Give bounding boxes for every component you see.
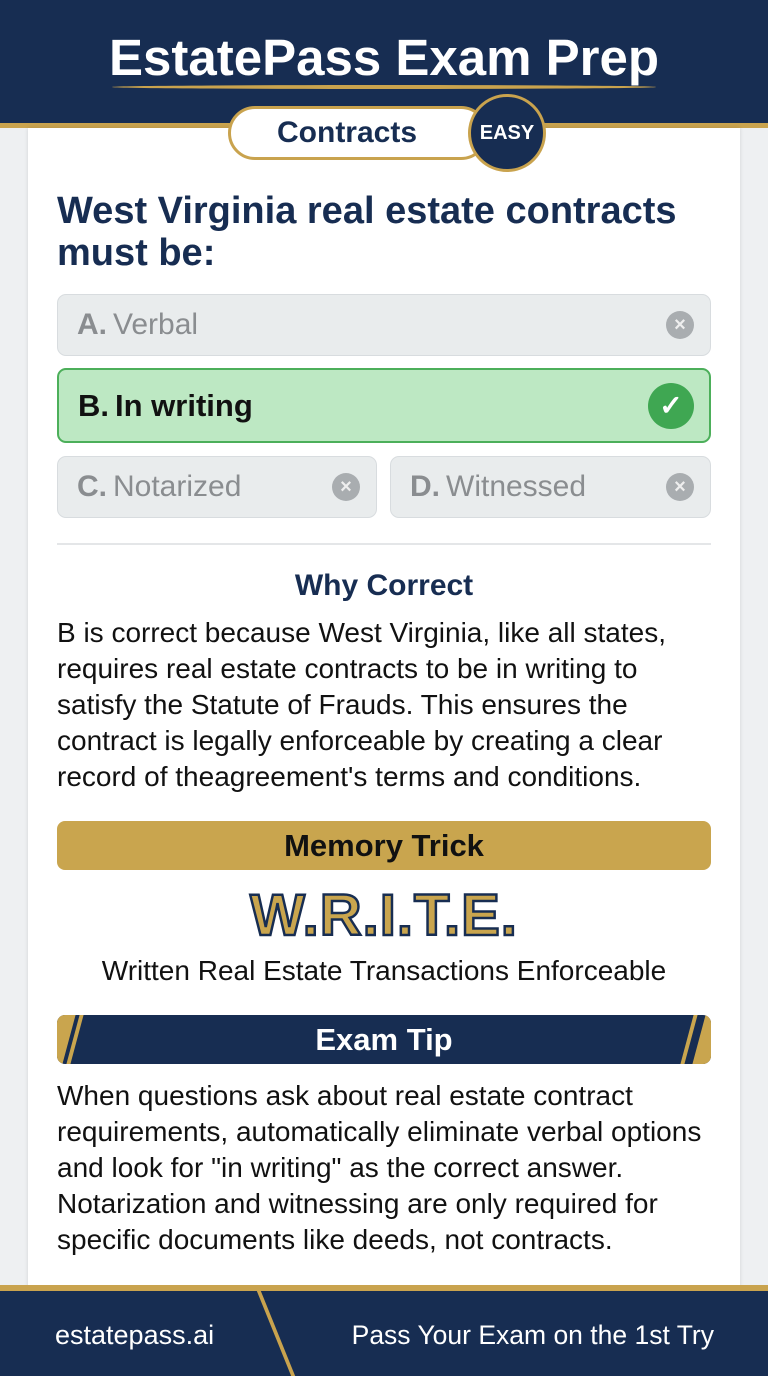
option B correct: [57, 368, 711, 443]
option D: [390, 456, 711, 518]
badge: EASY: EASY: [480, 122, 534, 144]
explanation text: B is correct because West Virginia, like all states,: [57, 617, 666, 648]
footer site: estatepass.ai: [55, 1320, 214, 1350]
explanation text: contract is legally enforceable by creating a clear: [57, 725, 662, 756]
title: EstatePass Exam Prep: [109, 29, 659, 86]
mnemonic W.R.I.T.E.: W.R.I.T.E.: [250, 883, 518, 948]
footer: [0, 1285, 768, 1376]
option A: A.: [77, 308, 107, 341]
option C: [57, 456, 377, 518]
mnemonic meaning: Written Real Estate Transactions Enforceable: [102, 955, 666, 986]
option D: ×: [674, 476, 686, 498]
option B correct: B.: [78, 388, 109, 422]
exam tip text: and look for "in writing" as the correct answer.: [57, 1152, 623, 1183]
footer slogan: Pass Your Exam on the 1st Try: [352, 1320, 714, 1350]
exam tip banner: Exam Tip: [315, 1022, 453, 1057]
option A: Verbal: [113, 308, 198, 341]
topic pill: [228, 106, 488, 160]
option C: C.: [77, 470, 107, 503]
option D: Witnessed: [446, 470, 586, 503]
topic pill: Contracts: [277, 116, 417, 149]
explanation text: satisfy the Statute of Frauds. This ensures the: [57, 689, 628, 720]
card: [28, 128, 740, 1288]
exam tip text: specific documents like deeds, not contracts.: [57, 1224, 613, 1255]
option A: [57, 294, 711, 356]
memory trick banner: [57, 821, 711, 870]
question: must be:: [57, 232, 215, 274]
exam tip text: [57, 1080, 701, 1255]
option C: Notarized: [113, 470, 241, 503]
heading: why correct: Why Correct: [295, 569, 473, 602]
explanation text: record of theagreement's terms and conditions.: [57, 761, 641, 792]
question: West Virginia real estate contracts: [57, 190, 677, 232]
exam tip banner: [57, 1015, 711, 1064]
badge: EASY: [468, 94, 546, 172]
exam tip text: requirements, automatically eliminate verbal options: [57, 1116, 701, 1147]
option B correct: ✓: [659, 390, 683, 420]
option A: ×: [674, 314, 686, 336]
question: [57, 190, 677, 274]
exam tip text: Notarization and witnessing are only required for: [57, 1188, 658, 1219]
option C: ×: [340, 476, 352, 498]
memory trick banner: Memory Trick: [284, 828, 484, 863]
gold underline: [112, 85, 656, 89]
explanation text: requires real estate contracts to be in writing to: [57, 653, 638, 684]
option B correct: In writing: [115, 388, 253, 422]
exam tip text: When questions ask about real estate contract: [57, 1080, 633, 1111]
explanation text: [57, 617, 666, 792]
header: [0, 0, 768, 128]
option D: D.: [410, 470, 440, 503]
